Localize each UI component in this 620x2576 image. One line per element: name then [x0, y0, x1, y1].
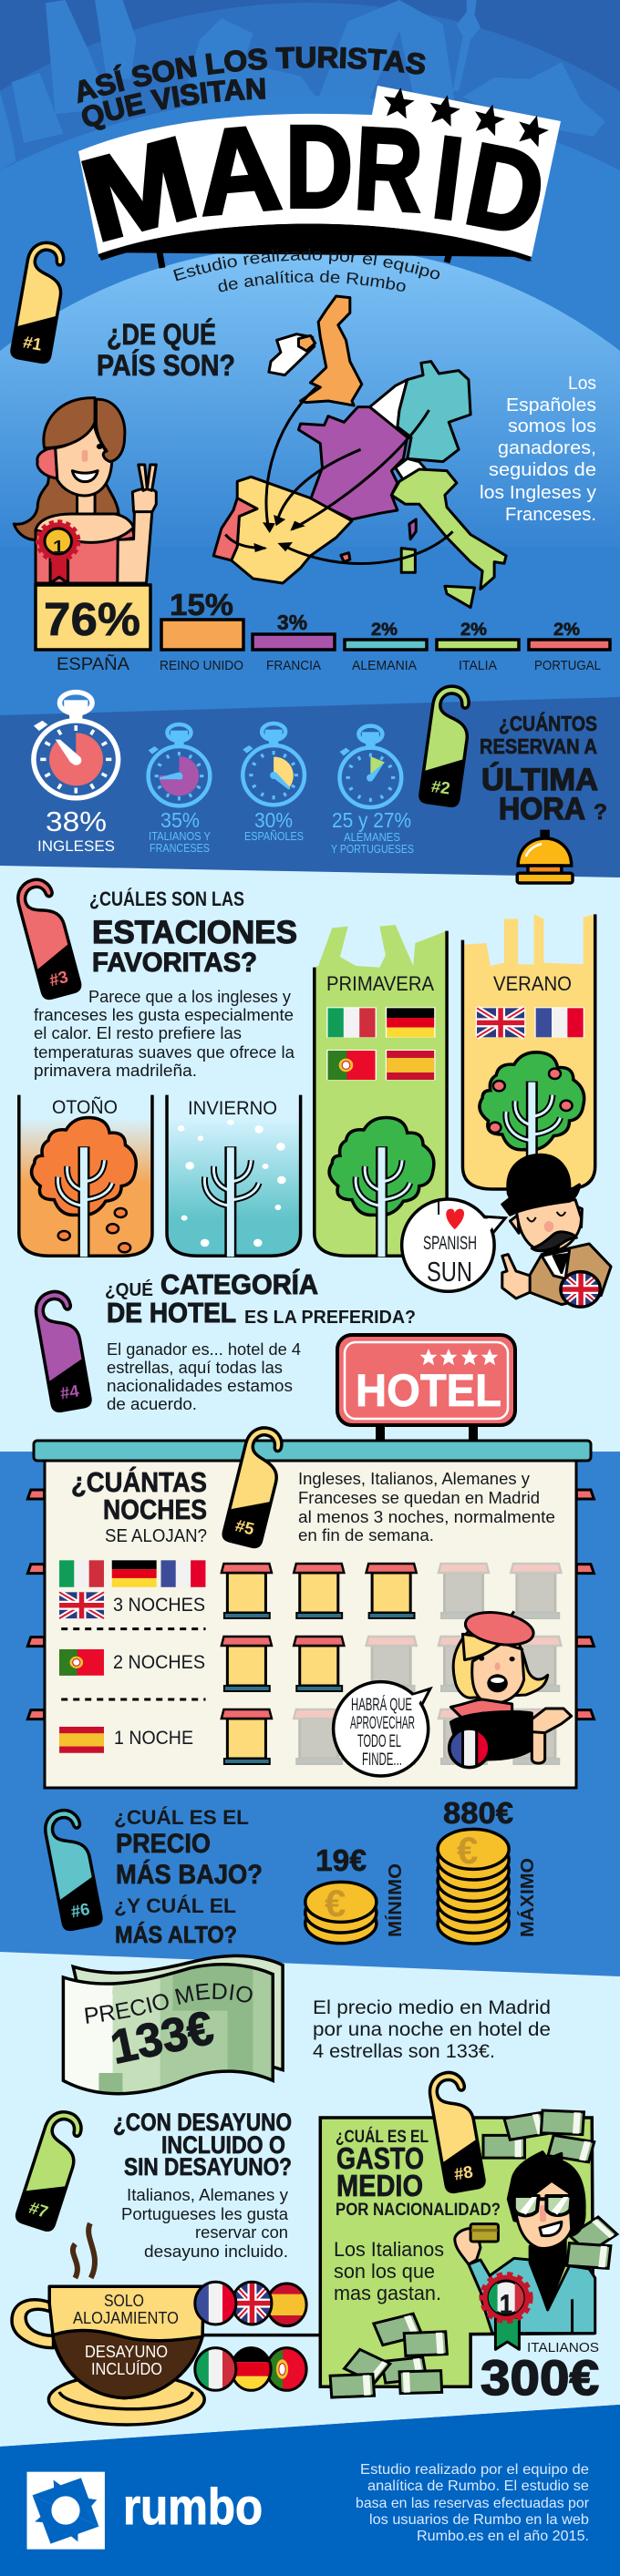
- text block: noches: al menos 3 noches, normalmente: [298, 1508, 555, 1526]
- icon: hotel sign: HOTEL: [356, 1365, 501, 1416]
- panel: precio medio: [62, 1954, 551, 2096]
- text block: hotel: [107, 1340, 301, 1413]
- subtitle: Estudio realizado por el equipo: [173, 248, 439, 281]
- stats labels: ESPAÑOLES: [244, 830, 304, 843]
- stats labels: FRANCESES: [150, 842, 210, 855]
- text block: source note: analítica de Rumbo. El estudio se: [367, 2479, 589, 2494]
- heading: ÚLTIMA: [481, 763, 598, 797]
- stars: [381, 86, 552, 149]
- heading: [97, 318, 235, 382]
- wordmark: rumbo: [123, 2478, 263, 2535]
- heading: [114, 1806, 263, 1948]
- window grid: [222, 1564, 561, 1764]
- stats labels: Y PORTUGUESES: [331, 843, 414, 856]
- flags: [59, 1560, 205, 1753]
- text block: desayuno: Italianos, Alemanes y: [127, 2186, 288, 2204]
- tag #2: [419, 683, 474, 806]
- coins: mínimo: [305, 1843, 406, 1944]
- text block: source note: Rumbo.es en el año 2015.: [417, 2529, 589, 2544]
- cup labels: INCLUÍDO: [91, 2360, 162, 2378]
- text block: estaciones: temperaturas suaves que ofrece la: [34, 1043, 295, 1062]
- bar: portugal 2%: 2%: [553, 621, 580, 640]
- heading: [113, 2109, 292, 2181]
- heading: POR NACIONALIDAD?: [336, 2201, 501, 2220]
- stats labels: 30%: [254, 808, 293, 832]
- text block: estaciones: franceses les gusta especialmente: [34, 1006, 294, 1024]
- rosette number: 1: [500, 2290, 512, 2320]
- text block: precio medio: [313, 1997, 551, 2062]
- panel: gasto medio: [320, 2069, 617, 2406]
- text block: noches: [298, 1470, 555, 1545]
- label: italianos: ITALIANOS: [527, 2340, 599, 2355]
- heading: MÁS BAJO?: [116, 1859, 263, 1890]
- character: british gentleman: [502, 1155, 611, 1308]
- coins: máximo: [438, 1796, 538, 1944]
- tag #5: [222, 1424, 288, 1548]
- text block: desayuno: reservar con: [195, 2223, 288, 2242]
- stopwatch: 38% ingleses: [34, 693, 119, 798]
- text block: desayuno: Portugueses les gusta: [121, 2205, 289, 2223]
- ledges: [27, 1490, 594, 1719]
- heading: [105, 1268, 416, 1329]
- label: PRIMAVERA: [326, 972, 434, 995]
- bubble text: I: [436, 1196, 441, 1219]
- text block: españoles: Los: [568, 374, 596, 394]
- madrid wordmark: D: [285, 102, 353, 232]
- season: invierno: [167, 1095, 301, 1257]
- heading: así son los turistas: ASÍ SON LOS TURISTAS: [78, 46, 426, 104]
- money pile and flying bills: [330, 2110, 617, 2397]
- text block: estaciones: Parece que a los ingleses y: [88, 988, 291, 1006]
- madrid wordmark: A: [192, 100, 285, 241]
- heading: MEDIO: [336, 2169, 423, 2202]
- heading: ¿CUÁL ES EL: [114, 1806, 249, 1829]
- tag #1: [11, 240, 69, 364]
- text block: hotel: El ganador es... hotel de 4: [107, 1340, 301, 1359]
- label: VERANO: [493, 972, 572, 995]
- heading: [336, 2127, 501, 2220]
- text block: precio medio: El precio medio en Madrid: [313, 1997, 551, 2018]
- bar: españa 76%: ESPAÑA: [57, 654, 129, 674]
- tag #3: [14, 875, 81, 1000]
- badge: french flag: [449, 1729, 491, 1768]
- heading: ¿QUÉ: [105, 1279, 153, 1300]
- stats labels: INGLESES: [37, 837, 115, 855]
- heading: FAVORITAS?: [92, 948, 257, 978]
- text block: españoles: Españoles: [506, 395, 596, 416]
- panel: de qué país son: [11, 240, 610, 674]
- heading: INCLUIDO O: [161, 2131, 285, 2159]
- coins: mínimo: €: [325, 1882, 346, 1924]
- bubble text: [423, 1196, 477, 1288]
- text block: noches: Franceses se quedan en Madrid: [298, 1489, 540, 1507]
- heading: [480, 711, 607, 826]
- heading: ?: [594, 800, 607, 825]
- flags: solo alojamiento: [195, 2282, 306, 2326]
- bar: reino unido 15%: [160, 588, 243, 673]
- bubble text: SPANISH: [423, 1233, 477, 1254]
- tag #4: #4: [58, 1380, 81, 1403]
- bar: italia 2%: 2%: [460, 621, 487, 640]
- cup labels: [73, 2292, 179, 2378]
- map of europe: [213, 296, 506, 608]
- panel: cuántas noches: [27, 1424, 594, 1788]
- bar: portugal 2%: PORTUGAL: [534, 658, 601, 673]
- panel: desayuno: [12, 2107, 319, 2425]
- stopwatch: 35%: [149, 724, 210, 806]
- character: spanish woman: [14, 398, 156, 583]
- title block: [68, 46, 561, 292]
- text block: estaciones: el calor. El resto prefiere las: [34, 1024, 242, 1042]
- bar: reino unido 15%: 15%: [170, 588, 233, 621]
- sign: madrid billboard: [68, 86, 561, 268]
- text block: source note: los usuarios de Rumbo en la web: [369, 2512, 589, 2528]
- coin stack: [438, 1829, 509, 1944]
- heading: que visitan: QUE VISITAN: [82, 77, 266, 130]
- tag #8: #8: [452, 2161, 474, 2184]
- text block: hotel: nacionalidades estamos: [107, 1377, 293, 1395]
- bar: italia 2%: ITALIA: [459, 658, 497, 673]
- stats labels: 35%: [160, 808, 200, 832]
- bar: italia 2%: [437, 621, 519, 673]
- tag #1: #1: [22, 332, 44, 354]
- heading: DE HOTEL: [107, 1297, 236, 1329]
- subtitle: de analítica de Rumbo: [219, 270, 406, 292]
- night labels: [113, 1595, 205, 1749]
- speech bubble: spanish sun: [402, 1196, 505, 1291]
- heading: SE ALOJAN?: [105, 1526, 207, 1546]
- tag #6: [42, 1807, 102, 1931]
- cup labels: DESAYUNO: [85, 2343, 168, 2361]
- bubble shape: [402, 1199, 505, 1291]
- icon: hotel sign: [337, 1335, 515, 1443]
- bar: alemania 2%: [345, 621, 427, 673]
- text block: source note: basa en las reservas efectuadas por: [356, 2496, 590, 2511]
- tag #5: #5: [233, 1515, 256, 1538]
- logo: rumbo: [26, 2472, 263, 2550]
- label: precio medio: PRECIO MEDIO: [85, 1983, 253, 2024]
- logo mark: [26, 2472, 105, 2550]
- night labels: 1 NOCHE: [114, 1728, 193, 1749]
- coins: mínimo: 19€: [315, 1843, 367, 1877]
- flag legend and windows: [59, 1560, 561, 1764]
- madrid wordmark: R: [352, 103, 426, 237]
- tag #7: [16, 2107, 88, 2232]
- heading: PRECIO: [116, 1829, 211, 1859]
- bar: reino unido 15%: REINO UNIDO: [160, 658, 243, 673]
- night labels: 2 NOCHES: [113, 1652, 205, 1673]
- text block: desayuno: desayuno incluido.: [144, 2242, 288, 2261]
- cup labels: ALOJAMIENTO: [73, 2309, 179, 2327]
- icon: reception bell: [517, 831, 573, 883]
- coins: mínimo: MÍNIMO: [385, 1863, 406, 1937]
- character: rich italian man: [455, 2152, 595, 2349]
- text block: source note: Estudio realizado por el equipo de: [360, 2462, 589, 2478]
- heading: ¿CON DESAYUNO: [113, 2109, 292, 2136]
- rosette: [482, 2275, 530, 2349]
- text block: españoles: los Ingleses y: [480, 483, 596, 503]
- flags: [476, 1007, 584, 1038]
- green panel: [320, 2118, 594, 2386]
- banknote: [63, 1955, 283, 2105]
- flags: desayuno incluido: [195, 2348, 306, 2390]
- text block: españoles: somos los: [508, 416, 596, 436]
- heading: ¿Y CUÁL EL: [114, 1894, 236, 1917]
- madrid wordmark: I: [427, 112, 470, 245]
- heading: PAÍS SON?: [97, 349, 235, 382]
- heading: MÁS ALTO?: [115, 1921, 237, 1948]
- text block: gasto: [334, 2238, 444, 2304]
- stats labels: ITALIANOS Y: [149, 830, 212, 843]
- heading: ¿CUÁLES SON LAS: [89, 888, 244, 910]
- text block: españoles: Franceses.: [505, 505, 596, 525]
- text block: precio medio: 4 estrellas son 133€.: [313, 2041, 495, 2062]
- heading: SIN DESAYUNO?: [124, 2153, 292, 2181]
- coins: máximo: €: [457, 1829, 478, 1872]
- icon: coffee cup: [12, 2223, 319, 2425]
- season: primavera: [315, 925, 447, 1257]
- coins: máximo: MÁXIMO: [517, 1858, 538, 1937]
- footer: [26, 2462, 590, 2550]
- madrid wordmark: M: [68, 112, 210, 267]
- bar: francia 3%: [253, 611, 335, 673]
- stats labels: [37, 806, 414, 856]
- panel shape and tree: [19, 1095, 152, 1257]
- heading: ES LA PREFERIDA?: [244, 1308, 416, 1328]
- panel: precio: [42, 1796, 538, 1948]
- heading: ¿CUÁNTOS: [499, 711, 597, 735]
- heading: HORA: [499, 792, 585, 826]
- tag #4: [33, 1288, 91, 1412]
- heading: NOCHES: [103, 1493, 207, 1525]
- coins: máximo: 880€: [443, 1796, 513, 1830]
- stopwatch: 30%: [243, 724, 305, 805]
- panel shape, skyline and tree: [315, 925, 447, 1257]
- text block: gasto: Los Italianos: [334, 2238, 444, 2261]
- bar: francia 3%: FRANCIA: [266, 658, 321, 673]
- season: verano: [462, 914, 595, 1192]
- bar: alemania 2%: 2%: [371, 621, 398, 640]
- heading: [71, 1466, 207, 1546]
- awning: [34, 1441, 591, 1461]
- panel: categoría de hotel: [33, 1268, 515, 1443]
- rosette: [38, 522, 78, 583]
- text block: españoles: ganadores,: [498, 438, 596, 458]
- panel shape and bare tree: [167, 1095, 301, 1257]
- heading: RESERVAN A: [480, 734, 597, 758]
- text block: estaciones: [34, 988, 295, 1080]
- text block: gasto: son los que: [334, 2260, 435, 2283]
- panel: estaciones favoritas: [14, 875, 611, 1308]
- stats labels: 25 y 27%: [332, 808, 411, 832]
- heading: CATEGORÍA: [160, 1268, 318, 1300]
- stat: 300€: 300€: [480, 2351, 599, 2406]
- night labels: 3 NOCHES: [113, 1595, 205, 1616]
- speech bubble: habrá que aprovechar: [334, 1682, 430, 1776]
- text block: españoles: [480, 374, 596, 525]
- text block: gasto: mas gastan.: [334, 2282, 441, 2304]
- heading: ESTACIONES: [92, 915, 297, 950]
- bar: españa 76%: 76%: [44, 593, 140, 645]
- madrid wordmark: D: [456, 118, 554, 261]
- arrows to spain: [225, 387, 453, 563]
- bar: alemania 2%: ALEMANIA: [352, 658, 417, 673]
- cup labels: SOLO: [104, 2292, 144, 2310]
- character: french woman: [449, 1607, 572, 1768]
- heading: ¿DE QUÉ: [107, 318, 216, 351]
- season: otoño: [19, 1095, 152, 1257]
- bubble text: SUN: [427, 1256, 472, 1288]
- badge: uk flag: [560, 1271, 603, 1308]
- bubble text: APROVECHAR: [350, 1714, 415, 1733]
- sunglasses: [514, 2196, 572, 2215]
- text block: desayuno: [121, 2186, 289, 2261]
- text block: hotel: de acuerdo.: [107, 1395, 197, 1413]
- tag #3: #3: [47, 967, 70, 990]
- heading: ¿CUÁL ES EL: [336, 2127, 429, 2147]
- label: 133€: 133€: [106, 2002, 218, 2075]
- heading: GASTO: [336, 2141, 424, 2175]
- bubble text: HABRÁ QUE: [351, 1696, 412, 1715]
- label: OTOÑO: [52, 1096, 118, 1118]
- text block: precio medio: por una noche en hotel de: [313, 2019, 551, 2040]
- stats labels: ALEMANES: [344, 831, 400, 844]
- bar: portugal 2%: [529, 621, 610, 673]
- panel shape, skyline and tree: [462, 914, 595, 1192]
- flags: [326, 1007, 436, 1080]
- text block: source note: [356, 2462, 590, 2544]
- bar: españa 76%: [36, 585, 150, 674]
- stats labels: 38%: [46, 806, 107, 837]
- bubble text: TODO EL: [357, 1732, 401, 1751]
- bubble text: FINDE...: [362, 1750, 402, 1770]
- bubble shape: [334, 1682, 430, 1776]
- madrid wordmark: [68, 100, 554, 267]
- coin stack: [305, 1882, 377, 1944]
- text block: estaciones: primavera madrileña.: [34, 1062, 197, 1080]
- heading: [89, 888, 297, 978]
- tag #2: #2: [430, 776, 451, 798]
- heading: ¿CUÁNTAS: [71, 1466, 207, 1498]
- panel: última hora: [34, 683, 607, 883]
- tag #7: #7: [26, 2198, 50, 2222]
- building panel: [45, 1458, 576, 1788]
- label: INVIERNO: [188, 1098, 277, 1119]
- bar: francia 3%: 3%: [277, 611, 307, 634]
- rosette number: 1: [53, 538, 64, 558]
- credit card: [470, 2224, 498, 2242]
- text block: noches: Ingleses, Italianos, Alemanes y: [298, 1470, 530, 1488]
- text block: hotel: estrellas, aquí todas las: [107, 1359, 283, 1377]
- tag #8: [427, 2069, 485, 2193]
- stopwatch: 25 y 27%: [340, 726, 401, 807]
- tag #6: #6: [69, 1899, 91, 1922]
- bar chart: nationality shares: [36, 585, 610, 674]
- bubble text: [350, 1696, 415, 1770]
- text block: españoles: seguidos de: [489, 460, 596, 480]
- text block: noches: en fin de semana.: [298, 1526, 434, 1545]
